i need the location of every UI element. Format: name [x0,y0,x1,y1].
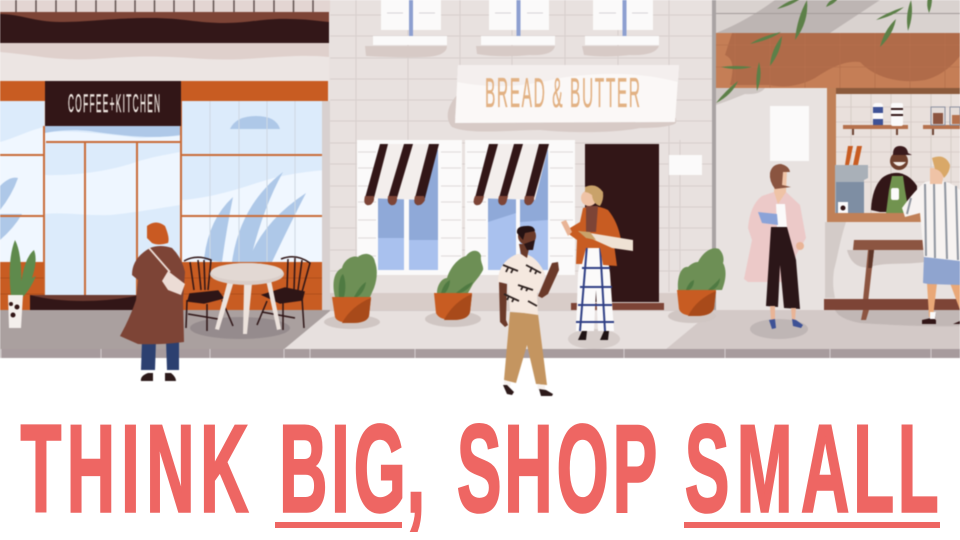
awning [474,144,549,205]
trousers [766,227,800,309]
trousers [504,312,547,385]
shoes [503,385,553,396]
bakery door [585,144,659,302]
shadow [568,329,620,349]
wall tile grid [330,0,712,292]
upper wall [716,0,960,33]
right arm [538,262,559,298]
title text [21,401,939,539]
curb [0,349,960,358]
door step [571,303,664,310]
legs [927,283,960,317]
underline: big [275,522,402,528]
right bakery window [465,140,575,275]
mugs [873,103,903,126]
right chair [257,257,310,330]
shirt leaf pattern [503,265,541,306]
left arm [499,282,508,327]
shadow [750,319,808,339]
coat [744,190,806,282]
ankles [770,306,796,320]
wall shadow [714,88,765,105]
coffee machine [835,165,868,214]
coat [120,246,185,344]
head [581,185,603,206]
hair [147,222,169,244]
planter 3 [668,248,726,323]
wall plaque [669,155,702,175]
window frames [0,101,325,296]
man in patterned shirt [498,226,559,396]
raised hand [561,220,572,236]
orange fascia [0,81,328,101]
storefront base [330,293,713,311]
brick base [0,101,330,311]
shop sign: coffee + kitchen: COFFEE+KITCHEN [68,89,160,117]
counter shadow [825,222,846,298]
counter base [824,299,960,310]
table shadow [847,250,925,267]
woman in brown coat [120,222,185,381]
socks and shoes [922,312,960,324]
upper windows [365,0,659,57]
shirt stripes [907,182,958,260]
baguettes [845,146,862,165]
shirt [902,181,960,261]
title text: THINK [21,401,249,539]
top [776,204,787,227]
service window [827,88,960,222]
balcony railing [0,0,330,12]
cafe table set [184,257,310,339]
left chair [184,257,233,331]
baguette [578,231,633,251]
legs [141,340,179,370]
bakery sign: BREAD & BUTTER [485,69,640,116]
title text: SHOP [457,401,657,539]
shoes [578,331,609,340]
street scene [0,0,960,396]
terracotta fascia [714,33,960,88]
building corner [712,0,716,311]
woman with baguette [561,185,633,349]
upper facade [0,43,329,81]
title text: , [407,401,425,539]
head [930,157,950,184]
barista [871,146,917,213]
panel: coffee shop building [0,0,330,312]
panel: bakery building [330,0,713,312]
bakery sign shadow [448,95,676,132]
title text: BIG [279,401,406,539]
head and hair [770,164,791,204]
left window glass [0,101,44,263]
man in striped shirt [902,157,960,324]
awning [364,144,439,205]
table shadow [190,317,290,339]
bakery sign [455,65,679,123]
shorts [923,256,960,285]
potted plant by coffee shop [8,240,36,328]
title [21,401,940,539]
title text: SMALL [685,401,939,539]
patterned trousers [576,245,614,331]
planter 1 [324,254,380,329]
hand [796,242,804,250]
scarf [586,206,598,232]
poster [770,106,809,161]
pavement [0,310,960,358]
counter pavement shadow [835,310,960,326]
planter 2 [425,251,483,327]
jars [931,107,960,125]
underline: small [684,522,940,528]
window sill frame [827,213,960,222]
left bakery window [357,140,462,275]
shop door glass [45,126,180,296]
shoes [769,319,803,329]
round table [210,263,284,334]
counter table [853,240,925,320]
shirt [498,254,545,315]
counter leg foot [861,310,869,320]
dark roof band [0,12,329,43]
jacket [566,206,621,266]
socks [504,380,545,390]
tablet [758,212,778,225]
woman in pink coat [744,164,808,339]
shop sign: coffee + kitchen [45,81,181,126]
bag [149,248,185,295]
window planter base [30,295,140,310]
shelves [843,125,960,135]
neck and head [517,226,536,258]
shoes [141,373,176,381]
right window glass [181,101,325,263]
panel: cafe building [712,0,960,320]
hanging leaves [716,0,932,103]
